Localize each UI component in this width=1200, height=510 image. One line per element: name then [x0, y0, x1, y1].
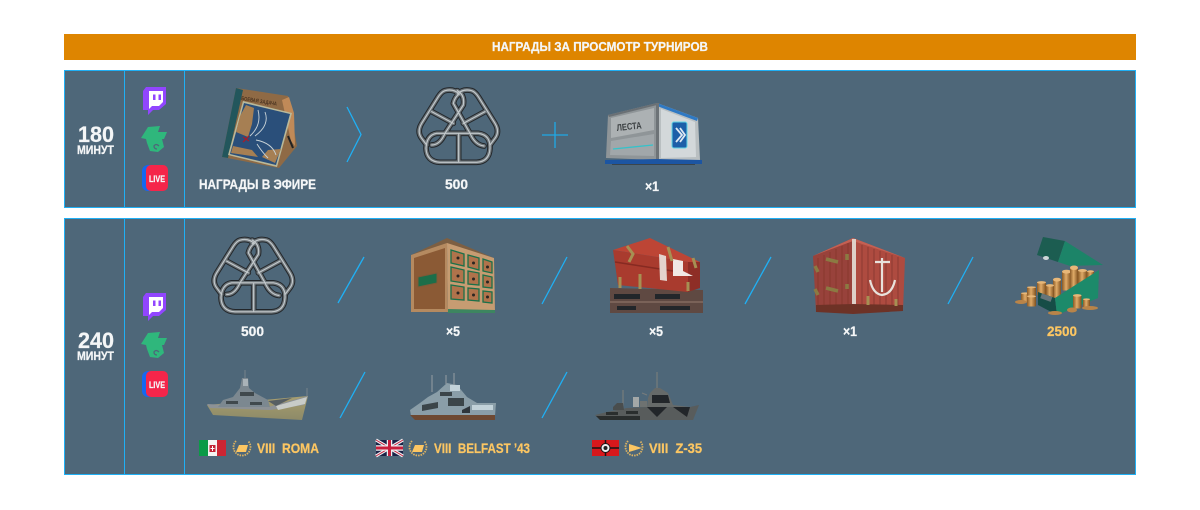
reward: red crate on pallet x5: ×5 [649, 324, 663, 339]
icon: live [142, 165, 168, 191]
reward: red container x1: ×1 [843, 324, 857, 339]
ship: Belfast '43 [410, 373, 496, 420]
duration: 180 minutes [77, 122, 114, 157]
duration: 240 minutes [77, 328, 114, 363]
duration: 180 minutes: МИНУТ [77, 145, 114, 157]
reward: chain 500 [214, 239, 292, 339]
panel: 180 minutes [64, 70, 1136, 208]
duration: 240 minutes: 240 [78, 328, 114, 353]
divider slash [745, 257, 771, 304]
divider slash [542, 372, 567, 418]
reward: chain 500: 500 [445, 177, 468, 192]
ship label: Italy VIII Roma: VIII ROMA [257, 440, 319, 456]
duration: 180 minutes: 180 [78, 122, 114, 147]
icon: twitch [143, 293, 166, 321]
reward: wooden crate x5 [411, 238, 495, 339]
panel: 240 minutes [64, 218, 1136, 475]
duration: 240 minutes: МИНУТ [77, 351, 114, 363]
icon: live [142, 371, 168, 397]
ship: Roma [207, 370, 308, 420]
icon: trovo [141, 332, 167, 358]
reward: green chest with coins 2500: 2500 [1047, 324, 1077, 339]
ship label: UK VIII Belfast '43 [376, 440, 530, 456]
arrow: chevron [347, 107, 361, 162]
ship label: UK VIII Belfast '43: VIII BELFAST ’43 [434, 440, 530, 456]
label: rewards on air: НАГРАДЫ В ЭФИРЕ [199, 176, 316, 192]
title bar [64, 34, 1136, 60]
ship: Z-35 [595, 372, 699, 420]
icon: trovo [141, 126, 167, 152]
ship label: Germany VIII Z-35: VIII Z-35 [649, 440, 702, 456]
icon: live: LIVE [149, 174, 165, 184]
reward: lesta container x1 [605, 103, 702, 194]
reward: chain 500: 500 [241, 324, 264, 339]
icon: twitch [143, 87, 166, 115]
icon: live: LIVE [149, 380, 165, 390]
reward: map folder: БОЕВАЯ ЗАДАЧА [241, 96, 277, 108]
reward: chain 500 [419, 90, 497, 192]
plus sign [542, 122, 568, 148]
reward: red container x1 [813, 238, 905, 339]
divider slash [340, 372, 365, 418]
reward: map folder [222, 88, 297, 168]
ship label: Italy VIII Roma [199, 440, 319, 456]
divider slash [338, 257, 364, 303]
reward: green chest with coins 2500 [1015, 237, 1103, 339]
divider slash [948, 257, 973, 304]
reward: lesta container x1: ЛЕСТА [616, 120, 642, 134]
reward: wooden crate x5: ×5 [446, 324, 460, 339]
reward: lesta container x1: ×1 [645, 179, 659, 194]
title bar: НАГРАДЫ ЗА ПРОСМОТР ТУРНИРОВ [492, 40, 708, 54]
reward: red crate on pallet x5 [610, 238, 703, 339]
ship label: Germany VIII Z-35 [592, 440, 702, 456]
divider slash [542, 257, 567, 304]
